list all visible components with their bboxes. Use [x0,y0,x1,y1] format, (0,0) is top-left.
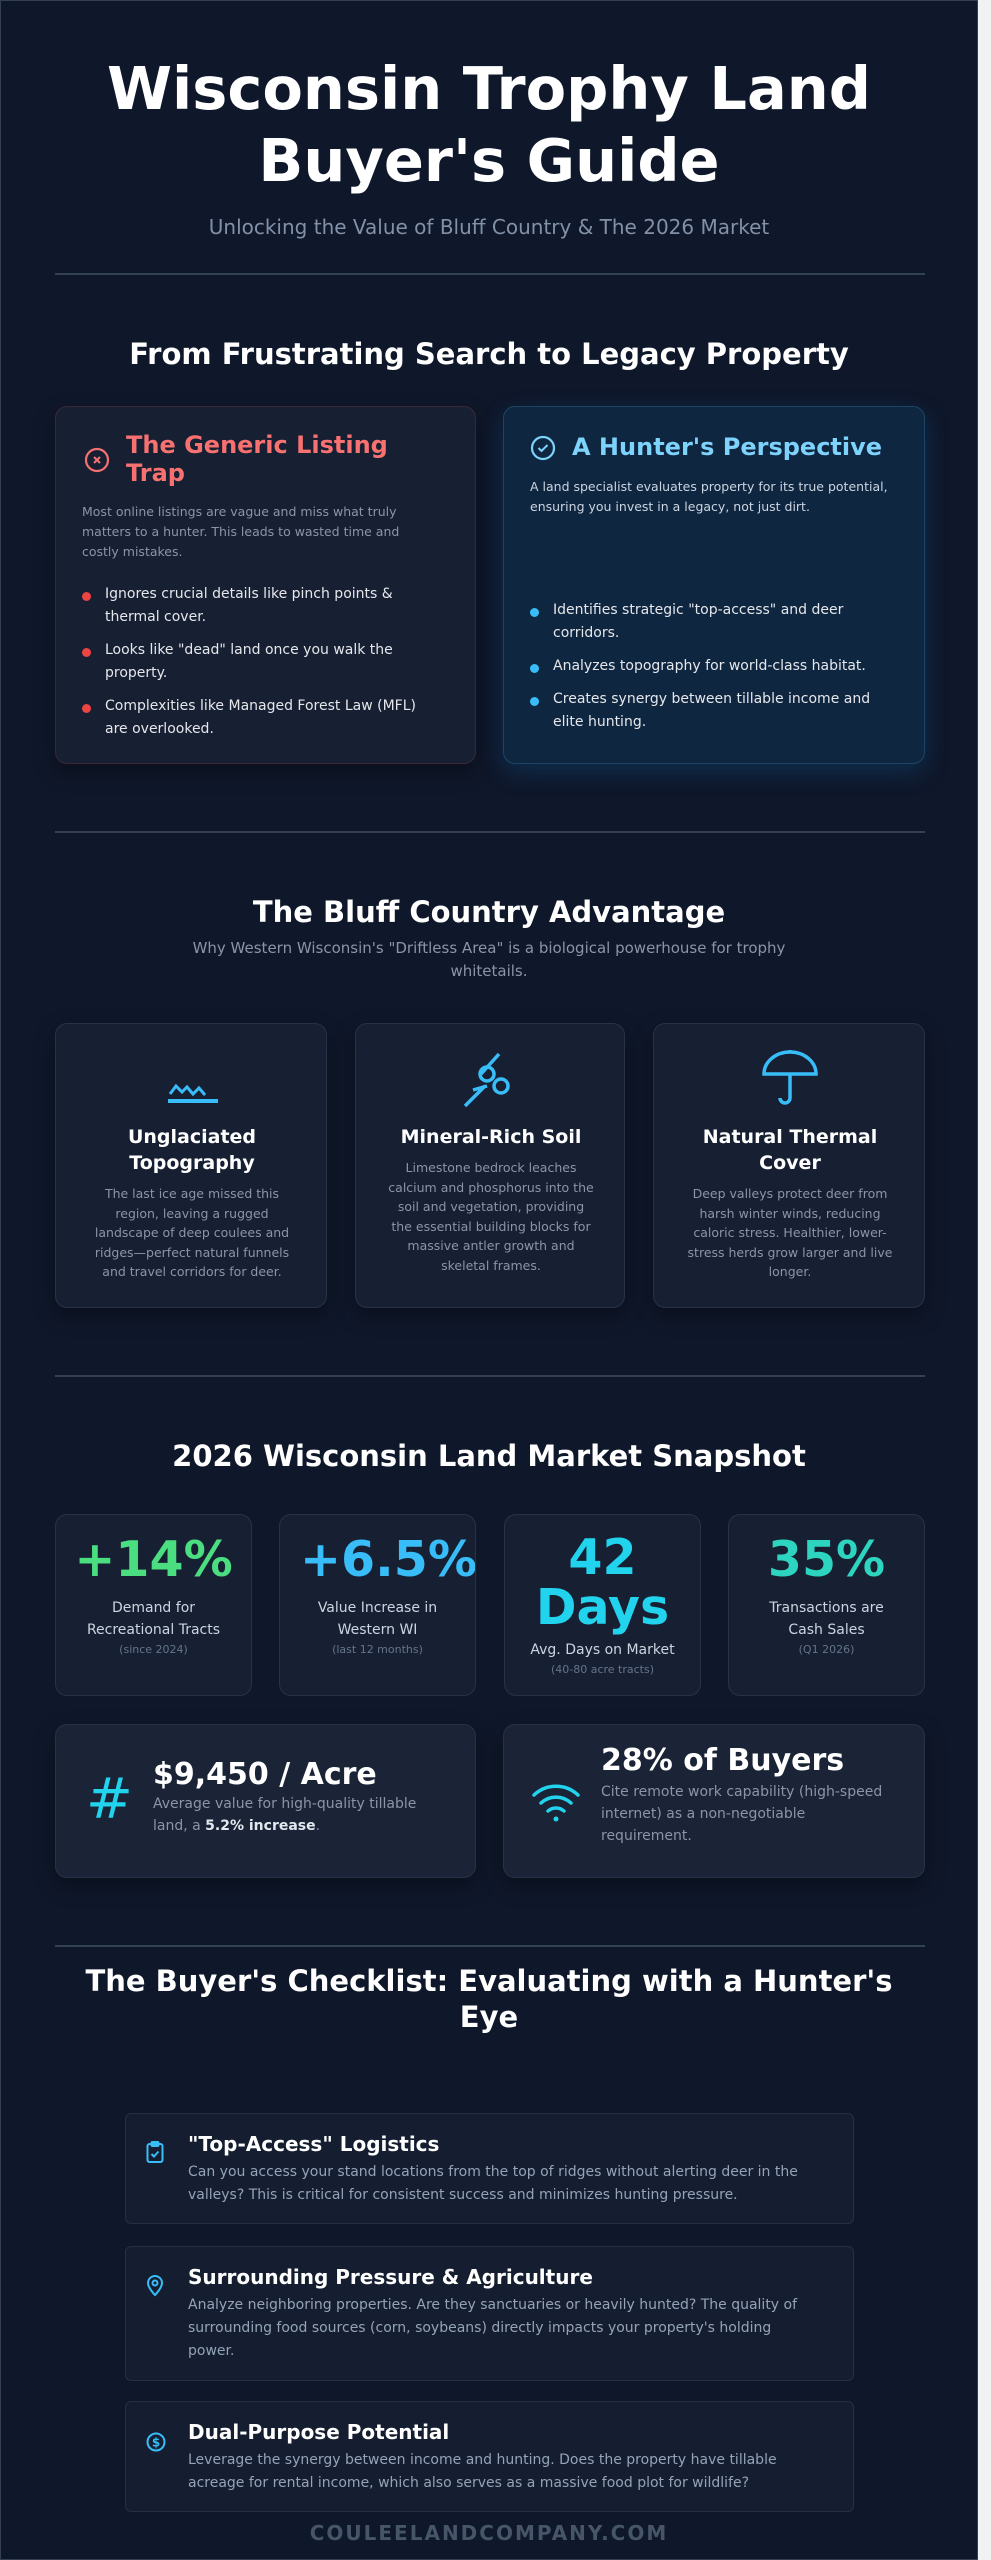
text: Average value for high-quality tillable land, a 5.2% increase. [153,1796,416,1834]
icon: umbrella [762,1050,818,1105]
panel: natural thermal cover [653,1023,925,1308]
checklist item: surrounding pressure [125,2246,854,2381]
stat: demand: Demand for [112,1600,195,1616]
icon: check circle [530,436,556,460]
stat: demand: Recreational Tracts [87,1622,220,1638]
heading: generic listing trap: The Generic Listing Trap [126,431,388,487]
stat: cash sales [728,1514,925,1696]
checklist item: dual-purpose: Leverage the synergy between income and hunting. Does the property have tillable acreage for rental income, which also serves as a massive food plot for wildlife? [188,2452,777,2491]
text: Cite remote work capability (high-speed internet) as a non-negotiable requirement. [601,1784,882,1844]
list: benefits: Creates synergy between tillable income and elite hunting. [553,691,870,730]
stat: cash sales: Transactions are [769,1600,884,1616]
icon: dollar circle: $ [152,2436,160,2450]
icon: dollar circle [146,2432,166,2452]
text: intro: A land specialist evaluates property for its true potential, ensuring you invest in a legacy, not just dirt. [530,479,888,514]
title [107,54,871,195]
footer: COULEELANDCOMPANY.COM [310,2521,668,2545]
stat: value increase: (last 12 months) [332,1643,423,1656]
icon: terrain [168,1084,218,1103]
panel: hunter's perspective [503,406,925,764]
stat: cash sales: (Q1 2026) [799,1643,854,1656]
subtitle: Unlocking the Value of Bluff Country & The 2026 Market [209,215,769,239]
list: problems [82,586,416,737]
stat: demand: (since 2024) [119,1643,188,1656]
text: The last ice age missed this region, leaving a rugged landscape of deep coulees and ridges—perfect natural funnels and travel corridors for deer. [95,1186,289,1279]
title: Unglaciated Topography [128,1126,256,1174]
list: benefits: Analyzes topography for world-class habitat. [553,658,866,674]
icon: map pin [147,2275,163,2296]
stat: days on market: 42 [568,1529,637,1586]
list: problems: Ignores crucial details like pinch points & thermal cover. [105,586,393,625]
stat: days on market [504,1514,701,1696]
stat: demand: +14% [74,1531,233,1588]
heading: buyer's checklist: The Buyer's Checklist: Evaluating with a Hunter's Eye [85,1964,893,2034]
panel: remote buyers [503,1724,925,1878]
heading: from frustrating search: From Frustrating Search to Legacy Property [129,337,849,371]
panel: generic listing trap [55,406,476,764]
checklist item: dual-purpose [125,2401,854,2512]
subtitle: driftless: Why Western Wisconsin's "Driftless Area" is a biological powerhouse for trophy whitetails. [193,939,785,980]
panel: unglaciated topography [55,1023,327,1308]
checklist item: top-access: "Top-Access" Logistics [188,2132,439,2156]
list: problems: Complexities like Managed Forest Law (MFL) are overlooked. [105,698,416,737]
title: Wisconsin Trophy Land [107,54,871,123]
title: Buyer's Guide [258,126,720,195]
icon: clipboard [146,2141,164,2163]
stat: value increase [279,1514,476,1696]
stat: demand [55,1514,252,1696]
stat: value increase: +6.5% [300,1531,476,1588]
stat: value increase: Value Increase in [318,1600,437,1616]
title: Mineral-Rich Soil [401,1126,581,1148]
text: Limestone bedrock leaches calcium and phosphorus into the soil and vegetation, providing the essential building blocks for massive antler growth and skeletal frames. [388,1160,594,1272]
heading: market snapshot: 2026 Wisconsin Land Market Snapshot [172,1439,806,1473]
list: benefits: Identifies strategic "top-access" and deer corridors. [553,602,843,641]
stat: cash sales: Cash Sales [788,1622,865,1638]
stat: days on market: Days [536,1579,669,1636]
value: $9,450 / Acre [153,1757,377,1792]
icon: x circle [84,448,110,472]
heading: bluff country advantage: The Bluff Country Advantage [253,895,725,929]
title: Natural Thermal Cover [703,1126,877,1174]
value: 28% of Buyers [601,1743,844,1778]
list: problems: Looks like "dead" land once you walk the property. [105,642,393,681]
icon: soil sprout [464,1052,510,1108]
panel: mineral-rich soil [355,1023,625,1308]
text: intro: Most online listings are vague and miss what truly matters to a hunter. This leads to wasted time and costly mistakes. [82,504,399,559]
checklist item: dual-purpose: Dual-Purpose Potential [188,2420,449,2444]
stat: days on market: Avg. Days on Market [530,1642,675,1658]
checklist item: top-access: Can you access your stand locations from the top of ridges without alerting deer in the valleys? This is critical for consistent success and minimizes hunting pressure. [188,2164,798,2203]
stat: cash sales: 35% [768,1531,885,1588]
text: Deep valleys protect deer from harsh winter winds, reducing caloric stress. Healthier, lower-stress herds grow larger and live longer. [688,1186,892,1279]
checklist item: top-access [125,2113,854,2224]
stat: value increase: Western WI [338,1622,417,1638]
list: benefits [530,602,870,730]
icon: wifi [532,1784,580,1822]
panel: price per acre [55,1724,476,1878]
stat: days on market: (40-80 acre tracts) [551,1663,654,1676]
checklist item: surrounding pressure: Surrounding Pressure & Agriculture [188,2265,593,2289]
heading: hunter's perspective: A Hunter's Perspective [572,433,882,461]
icon: hash: # [86,1767,133,1832]
checklist item: surrounding pressure: Analyze neighboring properties. Are they sanctuaries or heavily hunted? The quality of surrounding food sources (corn, soybeans) directly impacts your property's holding power. [188,2297,797,2359]
